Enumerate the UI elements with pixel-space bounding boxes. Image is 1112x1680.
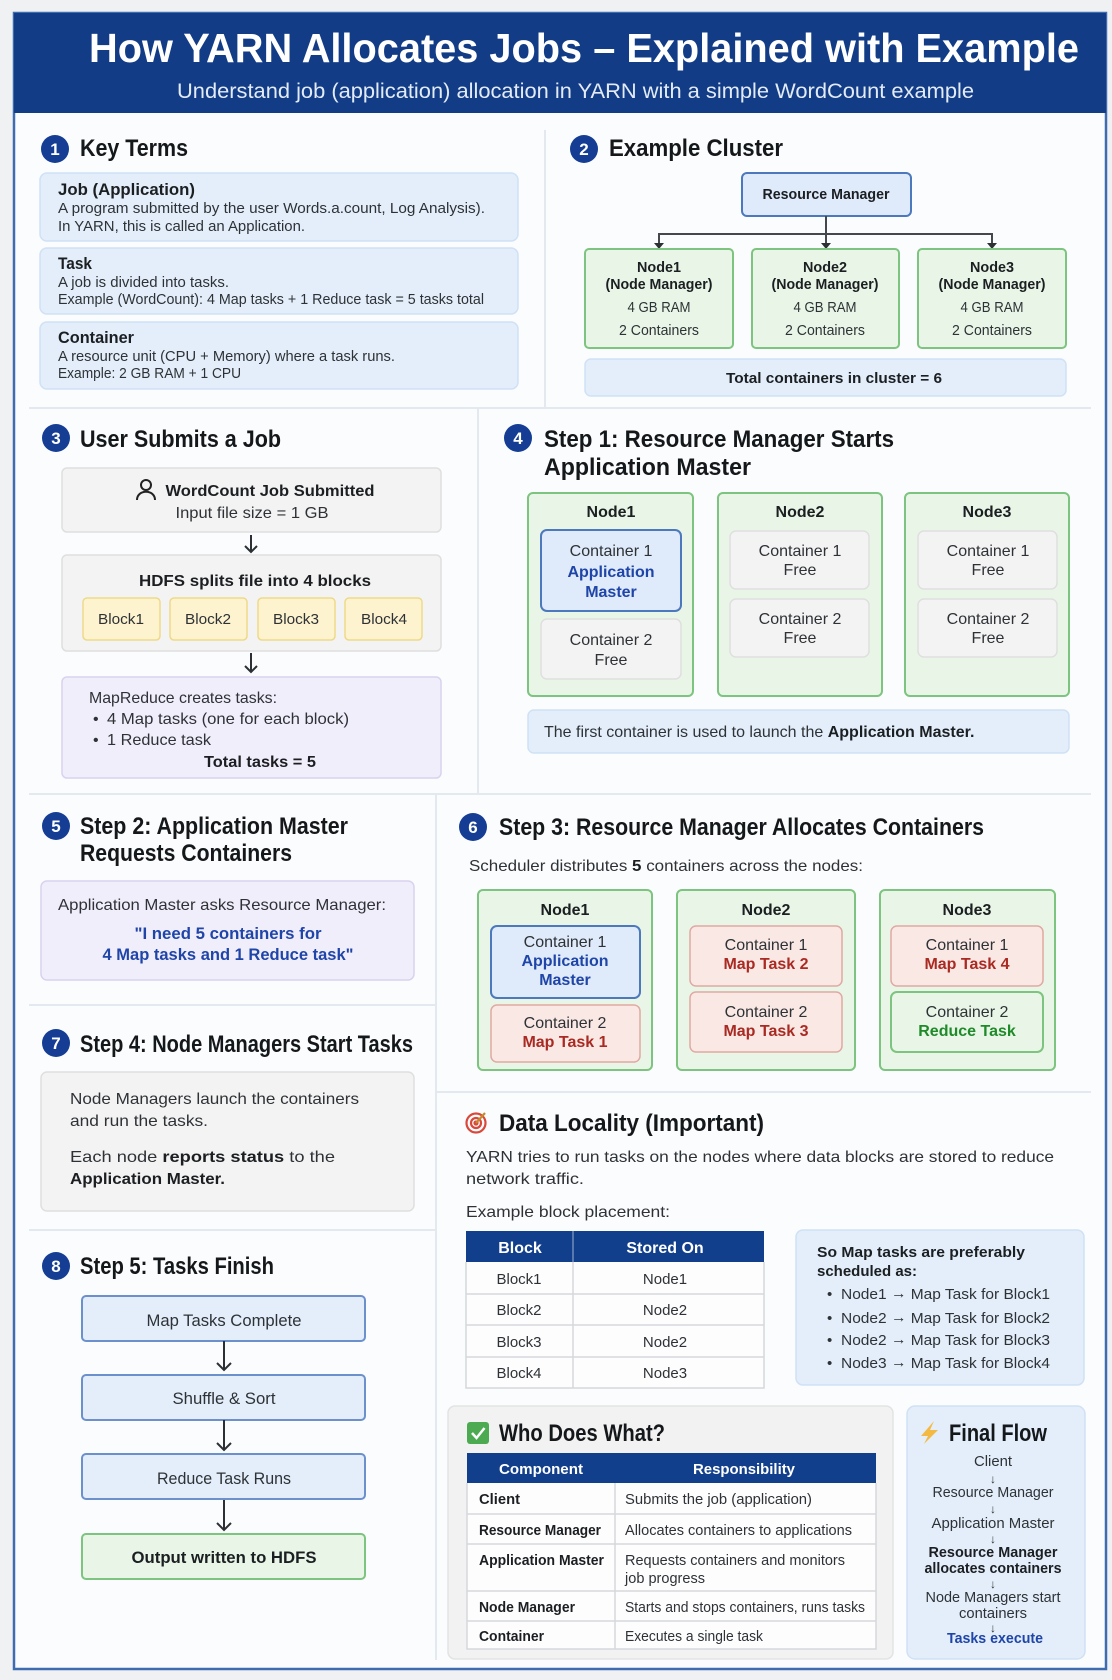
card: container: Container	[58, 328, 134, 347]
node 1: 4 GB RAM	[628, 299, 690, 316]
map task 1 container: Map Task 1	[522, 1034, 608, 1051]
badge 1: 1	[50, 140, 60, 159]
callout: preferred scheduling: Map Task for Block1	[906, 1286, 1050, 1303]
badge 2: 2	[579, 140, 589, 159]
flow steps: allocates containers	[924, 1561, 1062, 1577]
card: task: Task	[58, 254, 92, 273]
table: responsibilities: Executes a single task	[625, 1629, 764, 1645]
table: block placement: Block	[498, 1240, 542, 1257]
flow: reduce task runs: Reduce Task Runs	[157, 1470, 291, 1488]
callout: preferred scheduling: →	[891, 1285, 906, 1302]
container: application master: Container 1	[570, 543, 652, 560]
panel: step 3	[459, 813, 1055, 1070]
node 3: 4 GB RAM	[960, 299, 1024, 316]
heading: final flow: Final Flow	[949, 1420, 1047, 1447]
node 1 column	[528, 493, 693, 696]
arrow	[217, 1341, 231, 1370]
map task 4 container: Map Task 4	[924, 956, 1010, 973]
block 2: Block2	[185, 611, 231, 628]
container: application master: Master	[585, 584, 637, 601]
hdfs blocks box	[62, 555, 441, 651]
node 3: 2 Containers	[952, 322, 1032, 339]
card: container: Example: 2 GB RAM + 1 CPU	[58, 366, 241, 382]
badge 6	[459, 813, 487, 841]
callout: preferred scheduling: •	[827, 1355, 832, 1372]
map task 2 container	[690, 926, 842, 986]
heading: data locality: Data Locality (Important)	[499, 1110, 764, 1137]
container 1 free	[918, 531, 1057, 589]
node 3	[918, 249, 1066, 348]
panel: who does what	[448, 1406, 893, 1659]
description: YARN tries to run tasks on the nodes where data blocks are stored to reduce	[466, 1149, 1054, 1166]
table: responsibilities: Application Master	[479, 1553, 604, 1569]
table: block placement: Block2	[496, 1302, 542, 1319]
flow: output: Output written to HDFS	[132, 1549, 316, 1567]
card: job: Job (Application)	[58, 180, 195, 199]
scheduler note: Scheduler distributes 5 containers across the nodes:	[469, 858, 863, 875]
card: job	[40, 173, 518, 241]
badge 4	[504, 424, 532, 452]
node 3 column: Node3	[963, 504, 1012, 521]
panel: step 5	[42, 1252, 365, 1579]
node 1 allocation	[478, 890, 652, 1070]
table: responsibilities: Submits the job (application)	[625, 1492, 812, 1508]
request box: 4 Map tasks and 1 Reduce task"	[102, 946, 354, 964]
flow steps: Tasks execute	[947, 1631, 1043, 1647]
callout: preferred scheduling: Map Task for Block4	[906, 1355, 1050, 1372]
node 2 column: Node2	[776, 504, 825, 521]
title: How YARN Allocates Jobs – Explained with Example	[89, 25, 1079, 71]
map task 1 container: Container 2	[524, 1015, 606, 1032]
node 1	[585, 249, 733, 348]
callout: preferred scheduling: •	[827, 1286, 832, 1303]
arrows: manager to nodes	[654, 216, 997, 249]
reduce task container: Reduce Task	[918, 1023, 1016, 1040]
subtitle: Understand job (application) allocation in YARN with a simple WordCount example	[177, 80, 974, 103]
mapreduce tasks box: •	[93, 711, 99, 728]
callout: preferred scheduling: →	[891, 1331, 906, 1348]
container 2 free: Container 2	[947, 611, 1029, 628]
node 3 allocation: Node3	[943, 902, 992, 919]
description: network traffic.	[466, 1171, 584, 1188]
job submitted box: Input file size = 1 GB	[176, 505, 328, 522]
container 2 free: Free	[784, 630, 817, 647]
icon: lightning bolt	[921, 1421, 938, 1444]
request box	[41, 881, 414, 980]
application master container: Master	[539, 972, 591, 989]
table: block placement: Node3	[643, 1365, 687, 1382]
panel: user submits a job	[42, 424, 441, 778]
node manager description: Application Master.	[70, 1171, 225, 1188]
container 1 free: Free	[972, 562, 1005, 579]
heading: step 1	[544, 426, 894, 481]
card: job: A program submitted by the user Words.a.count, Log Analysis).	[58, 201, 485, 217]
map task 2 container: Container 1	[725, 937, 807, 954]
node 2: Node2	[803, 259, 847, 276]
node 2 allocation	[677, 890, 855, 1070]
resource manager box: Resource Manager	[762, 186, 890, 203]
badge 2	[570, 135, 598, 163]
container 2 free: Container 2	[759, 611, 841, 628]
container: free	[541, 619, 681, 679]
application master container	[491, 926, 640, 998]
table: block placement: Stored On	[626, 1240, 704, 1257]
flow: map tasks complete	[82, 1296, 365, 1341]
node 1: 2 Containers	[619, 322, 699, 339]
badge 8: 8	[51, 1257, 61, 1276]
note: first container: The first container is used to launch the Application Master.	[544, 724, 974, 741]
badge 3	[42, 424, 70, 452]
node manager description	[41, 1072, 414, 1211]
card: job: In YARN, this is called an Application.	[58, 219, 305, 235]
heading: step 2: Step 2: Application Master	[80, 813, 348, 840]
flow steps: ↓	[990, 1621, 996, 1635]
card: container	[40, 322, 518, 389]
node 2: (Node Manager)	[772, 276, 879, 293]
flow steps: Client	[974, 1454, 1012, 1470]
container: application master	[541, 530, 681, 611]
badge 8	[42, 1252, 70, 1280]
callout: preferred scheduling: So Map tasks are preferably	[817, 1244, 1026, 1261]
callout: preferred scheduling: →	[891, 1309, 906, 1326]
badge 6: 6	[468, 818, 478, 837]
table: responsibilities: Container	[479, 1629, 544, 1645]
flow: output	[82, 1534, 365, 1579]
callout: preferred scheduling: •	[827, 1310, 832, 1327]
heading: who does what: Who Does What?	[499, 1420, 665, 1447]
panel: step 1	[504, 424, 1069, 753]
heading: key terms: Key Terms	[80, 135, 188, 162]
flow: reduce task runs	[82, 1454, 365, 1499]
heading: example cluster: Example Cluster	[609, 135, 783, 162]
mapreduce tasks box	[62, 677, 441, 778]
table: responsibilities: Responsibility	[693, 1461, 796, 1478]
map task 4 container: Container 1	[926, 937, 1008, 954]
request box: Application Master asks Resource Manager:	[58, 897, 386, 914]
heading: step 3: Step 3: Resource Manager Allocates Containers	[499, 814, 984, 841]
application master container: Application	[521, 953, 609, 970]
block 3: Block3	[273, 611, 319, 628]
heading: step 1: Step 1: Resource Manager Starts	[544, 426, 894, 453]
node 3: (Node Manager)	[938, 276, 1046, 293]
table: responsibilities: job progress	[624, 1571, 705, 1587]
flow: shuffle and sort	[82, 1375, 365, 1420]
badge 4: 4	[513, 429, 523, 448]
card: container: A resource unit (CPU + Memory) where a task runs.	[58, 349, 395, 365]
reduce task container: Container 2	[926, 1004, 1008, 1021]
heading: step 5: Step 5: Tasks Finish	[80, 1253, 274, 1280]
badge 5: 5	[51, 817, 61, 836]
callout: preferred scheduling: Map Task for Block2	[906, 1310, 1050, 1327]
node manager description: Each node reports status to the	[70, 1149, 335, 1166]
container: free: Container 2	[570, 632, 652, 649]
node 1 allocation: Node1	[541, 902, 590, 919]
flow steps: Resource Manager	[928, 1545, 1058, 1561]
node 1: Node1	[637, 259, 681, 276]
table: responsibilities: Starts and stops containers, runs tasks	[625, 1600, 865, 1616]
card: task	[40, 248, 518, 314]
arrow	[217, 1500, 231, 1530]
mapreduce tasks box: •	[93, 732, 99, 749]
map task 2 container: Map Task 2	[723, 956, 809, 973]
callout: preferred scheduling: Node2	[841, 1332, 885, 1349]
heading: step 2	[80, 813, 348, 867]
node manager description: Node Managers launch the containers	[70, 1091, 359, 1108]
hdfs blocks box: HDFS splits file into 4 blocks	[139, 573, 371, 590]
arrow	[217, 1420, 231, 1450]
block 4	[345, 598, 422, 640]
job submitted box: WordCount Job Submitted	[166, 483, 374, 500]
callout: preferred scheduling: scheduled as:	[817, 1263, 917, 1280]
block 4: Block4	[361, 611, 407, 628]
map task 3 container: Map Task 3	[723, 1023, 809, 1040]
container 1 free: Container 1	[759, 543, 841, 560]
badge 7: 7	[51, 1034, 61, 1053]
total containers bar: Total containers in cluster = 6	[726, 370, 942, 387]
node 3: Node3	[970, 259, 1014, 276]
callout: preferred scheduling: Node1	[841, 1286, 885, 1303]
flow steps: Node Managers start	[926, 1590, 1060, 1606]
block 1	[83, 598, 160, 640]
callout: preferred scheduling: •	[827, 1332, 832, 1349]
block 2	[170, 598, 247, 640]
flow: shuffle and sort: Shuffle & Sort	[172, 1390, 276, 1408]
table: responsibilities	[467, 1453, 876, 1649]
callout: preferred scheduling	[796, 1230, 1084, 1385]
note: first container	[528, 710, 1069, 753]
badge 1	[41, 135, 69, 163]
badge 5	[42, 812, 70, 840]
node 1 column: Node1	[587, 504, 636, 521]
flow steps: ↓	[990, 1502, 996, 1516]
table: responsibilities: Requests containers and monitors	[625, 1553, 845, 1569]
mapreduce tasks box: MapReduce creates tasks:	[89, 690, 277, 707]
icon: check	[467, 1422, 489, 1444]
container 2 free: Free	[972, 630, 1005, 647]
table: block placement	[466, 1231, 764, 1388]
reduce task container	[891, 992, 1043, 1052]
map task 4 container	[891, 926, 1043, 986]
description	[466, 1149, 1054, 1221]
container 1 free: Free	[784, 562, 817, 579]
map task 3 container: Container 2	[725, 1004, 807, 1021]
flow steps: containers	[959, 1606, 1027, 1622]
node 2: 4 GB RAM	[794, 299, 856, 316]
card: task: Example (WordCount): 4 Map tasks + 1 Reduce task = 5 tasks total	[58, 292, 484, 308]
table: responsibilities: Client	[479, 1492, 520, 1508]
flow steps: Resource Manager	[932, 1485, 1054, 1501]
callout: preferred scheduling: Map Task for Block3	[906, 1332, 1050, 1349]
application master container: Container 1	[524, 934, 606, 951]
flow steps: ↓	[990, 1577, 996, 1591]
flow steps: ↓	[990, 1472, 996, 1486]
resource manager box	[742, 173, 911, 216]
badge 7	[42, 1029, 70, 1057]
container 2 free	[730, 599, 869, 657]
map task 1 container	[491, 1005, 640, 1062]
table: responsibilities: Component	[499, 1461, 583, 1478]
callout: preferred scheduling: Node2	[841, 1310, 885, 1327]
description: Example block placement:	[466, 1204, 670, 1221]
container: application master: Application	[567, 564, 655, 581]
icon: target	[466, 1113, 486, 1132]
callout: preferred scheduling: →	[891, 1354, 906, 1371]
flow: map tasks complete: Map Tasks Complete	[146, 1312, 302, 1330]
table: responsibilities: Node Manager	[479, 1600, 575, 1616]
table: block placement: Block3	[496, 1334, 542, 1351]
arrow: submit to split	[245, 535, 257, 552]
panel: step 4	[41, 1029, 414, 1211]
node 2 allocation: Node2	[742, 902, 791, 919]
icon: user	[137, 480, 155, 500]
node 2	[752, 249, 899, 348]
arrow: split to tasks	[245, 653, 257, 672]
job submitted box	[62, 468, 441, 532]
node 2: 2 Containers	[785, 322, 865, 339]
mapreduce tasks box: Total tasks = 5	[204, 754, 316, 771]
badge 3: 3	[51, 429, 61, 448]
panel: step 2	[41, 812, 414, 980]
container: free: Free	[595, 652, 628, 669]
table: block placement: Node1	[643, 1271, 687, 1288]
map task 3 container	[690, 992, 842, 1052]
flow steps: Application Master	[932, 1516, 1055, 1532]
mapreduce tasks box: 4 Map tasks (one for each block)	[107, 711, 349, 728]
node 1: (Node Manager)	[606, 276, 713, 293]
mapreduce tasks box: 1 Reduce task	[107, 732, 212, 749]
block 3	[258, 598, 335, 640]
card: task: A job is divided into tasks.	[58, 275, 229, 291]
block 1: Block1	[98, 611, 144, 628]
node manager description: and run the tasks.	[70, 1113, 208, 1130]
callout: preferred scheduling: Node3	[841, 1355, 885, 1372]
table: block placement: Node2	[643, 1334, 687, 1351]
panel: example cluster	[570, 135, 1066, 396]
table: block placement: Block4	[496, 1365, 542, 1382]
container 1 free	[730, 531, 869, 589]
flow steps: ↓	[990, 1532, 996, 1546]
panel: key terms	[40, 135, 518, 389]
table: responsibilities: Allocates containers to applications	[625, 1523, 852, 1539]
table: responsibilities: Resource Manager	[479, 1523, 601, 1539]
heading: step 1: Application Master	[544, 454, 751, 481]
node 2 column	[718, 493, 882, 696]
table: block placement: Block1	[496, 1271, 542, 1288]
header banner	[14, 13, 1106, 113]
node 3 column	[905, 493, 1069, 696]
heading: user submits: User Submits a Job	[80, 426, 281, 453]
container 2 free	[918, 599, 1057, 657]
node 3 allocation	[880, 890, 1055, 1070]
panel: final flow	[907, 1406, 1085, 1659]
container 1 free: Container 1	[947, 543, 1029, 560]
table: block placement: Node2	[643, 1302, 687, 1319]
panel: data locality	[466, 1110, 1084, 1388]
heading: step 2: Requests Containers	[80, 840, 292, 867]
flow steps	[924, 1454, 1062, 1647]
total containers bar	[585, 359, 1066, 396]
heading: step 4: Step 4: Node Managers Start Tasks	[80, 1031, 413, 1058]
request box: "I need 5 containers for	[134, 925, 322, 943]
